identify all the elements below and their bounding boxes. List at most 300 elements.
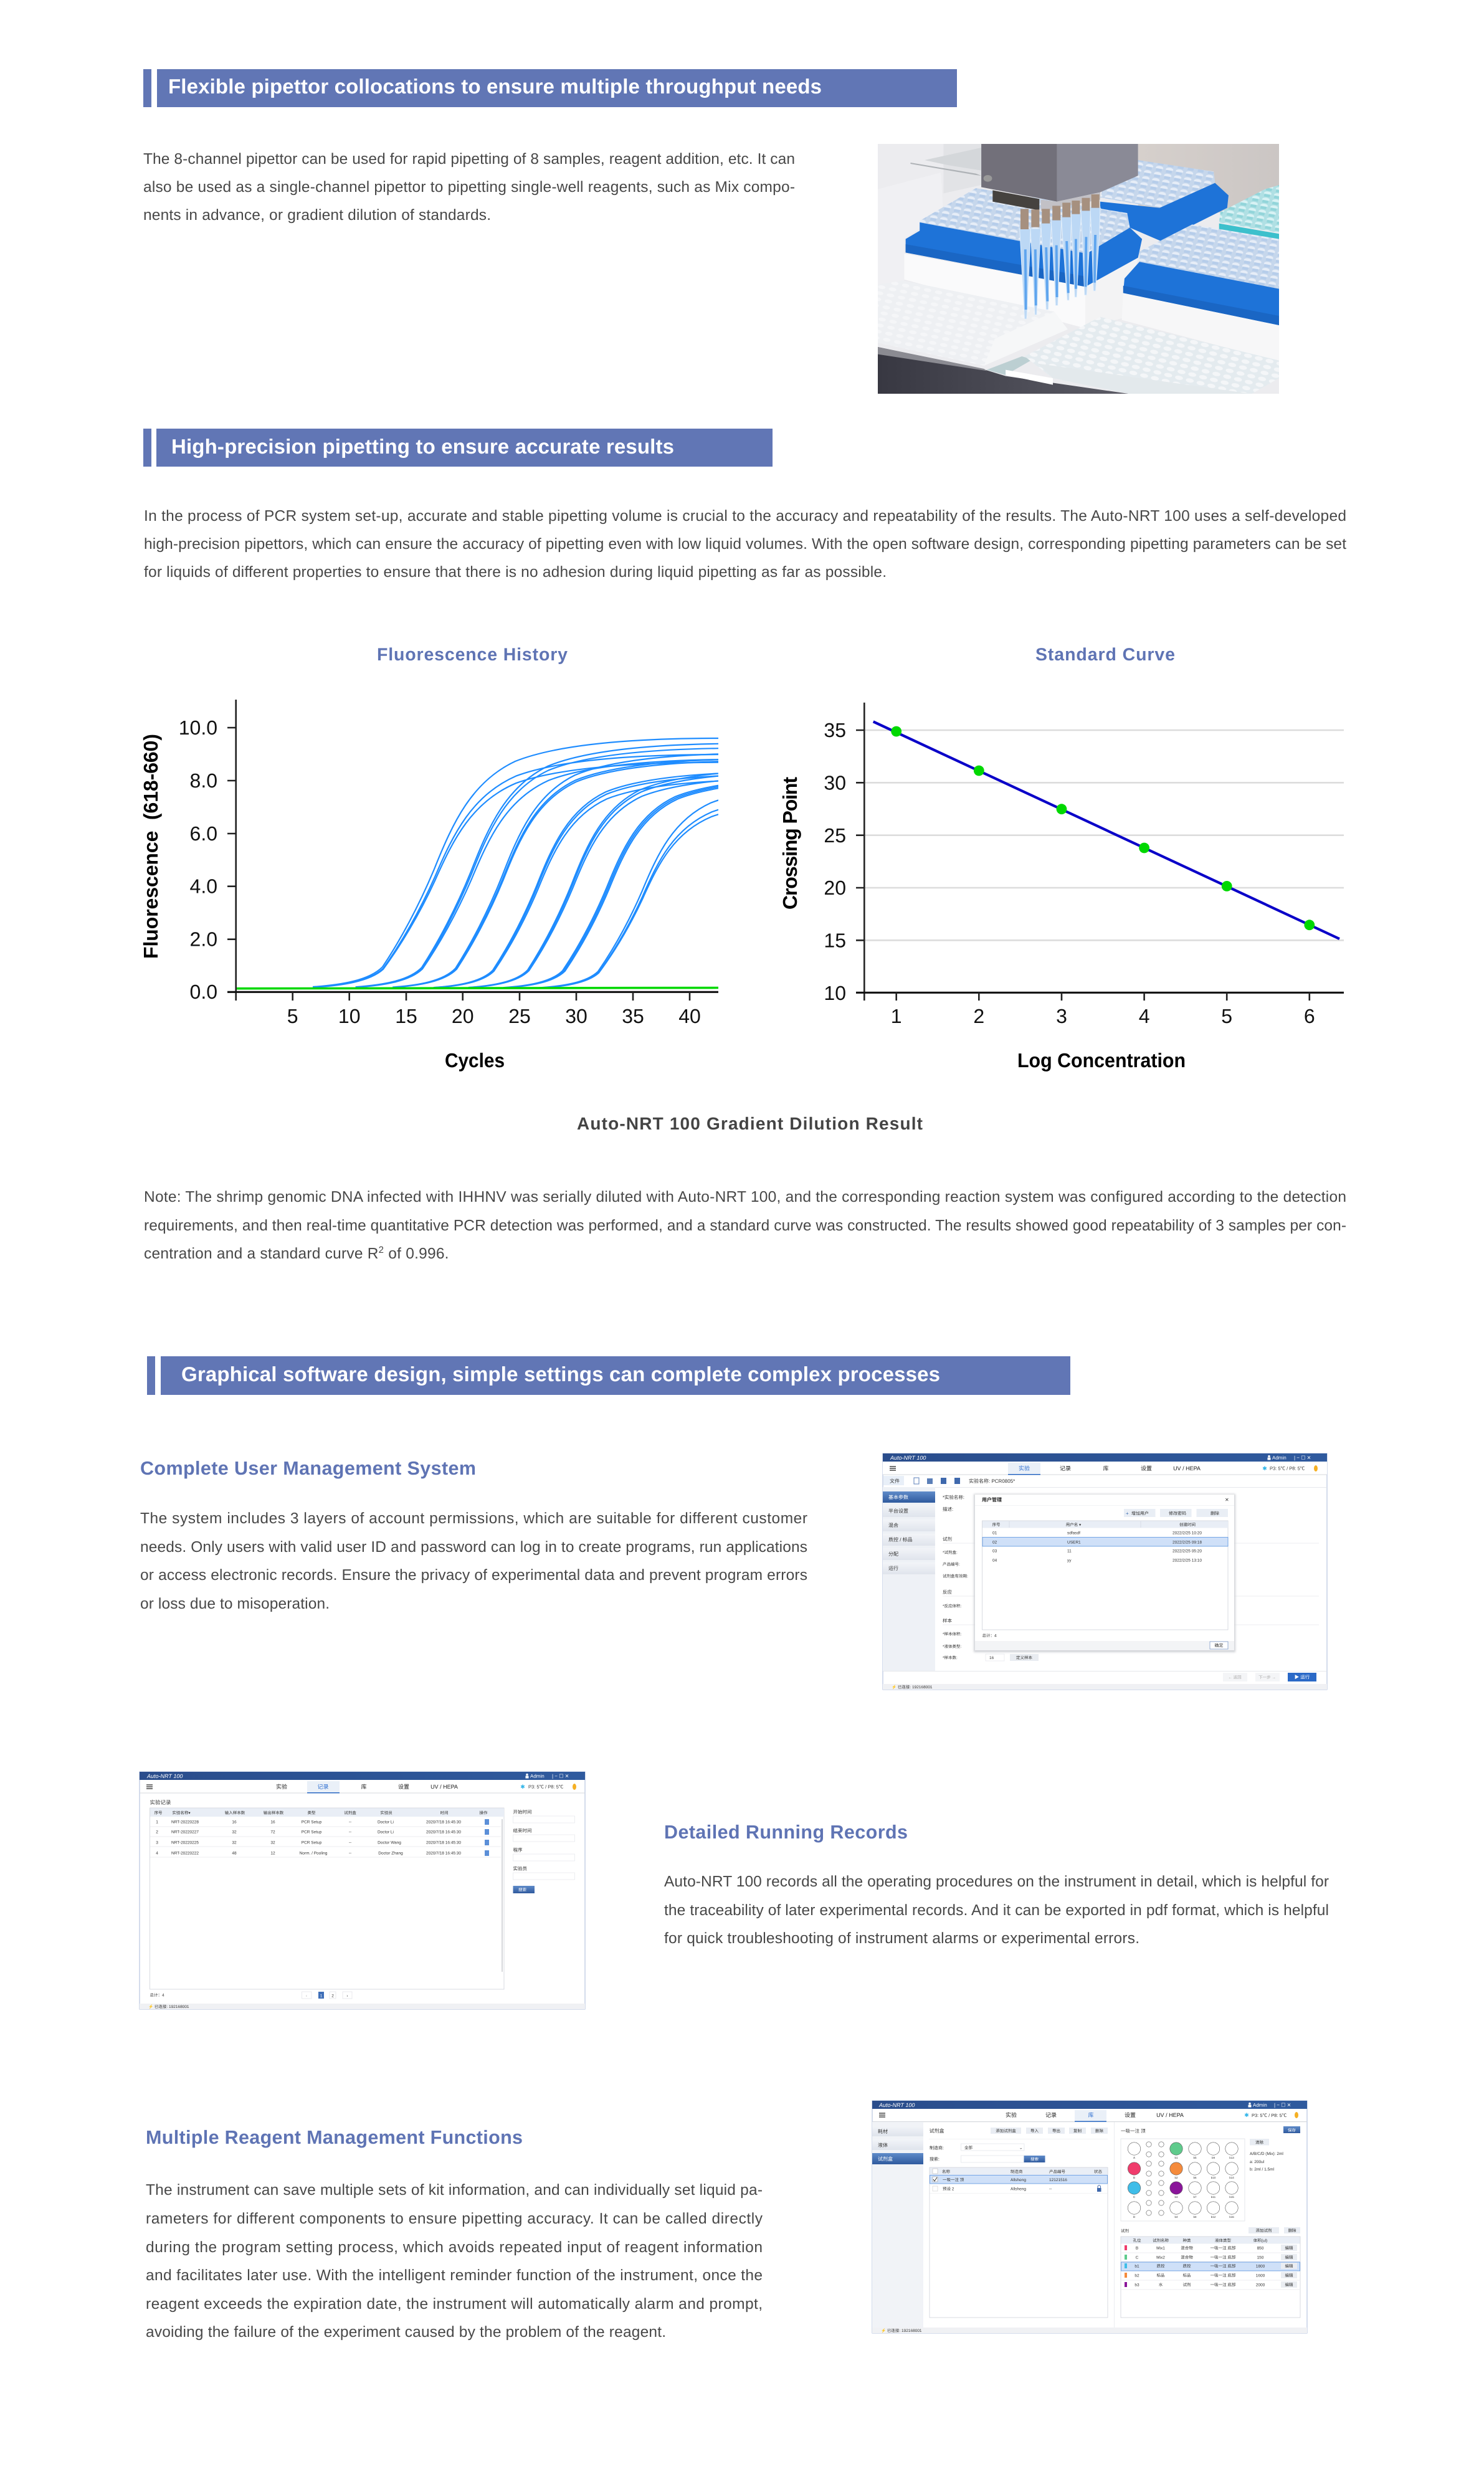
nav tabs: 实验	[1006, 2112, 1017, 2118]
reagent table: 编辑	[1285, 2245, 1293, 2250]
y tick labels: 6.0	[190, 822, 217, 845]
nav tabs: 设置	[398, 1784, 409, 1790]
records table: 2	[156, 1830, 158, 1834]
x tick labels: 35	[622, 1005, 644, 1027]
title bar: Auto-NRT 100	[146, 1773, 183, 1779]
user table: 11	[1067, 1549, 1072, 1554]
reagent table: 编辑	[1285, 2264, 1293, 2269]
nav tabs: ✱	[1262, 1465, 1267, 1472]
x tick labels: 30	[565, 1005, 587, 1027]
y tick labels: 4.0	[190, 875, 217, 897]
kit layout panel: A/B/C/D (Mix): 2ml	[1250, 2152, 1283, 2156]
status bar	[140, 2004, 585, 2009]
records table: 序号	[155, 1810, 163, 1815]
records table: --	[349, 1820, 351, 1824]
records table: Doctor Zhang	[378, 1852, 403, 1855]
records table: 2020/7/18 16:45:30	[426, 1852, 461, 1855]
dialog buttons: 删除	[1211, 1511, 1219, 1516]
kit layout panel: a: 200ul	[1250, 2160, 1265, 2164]
well labels: D	[1133, 2215, 1136, 2219]
search filters: 结束时间	[513, 1828, 532, 1833]
records table: PCR Setup	[302, 1830, 322, 1834]
back rack	[1100, 160, 1215, 208]
x tick labels: 1	[891, 1005, 902, 1027]
caption: gradient dilution result: Auto-NRT 100 Gradient Dilution Result	[577, 1114, 923, 1133]
reagent table: 一吸一注 底部	[1211, 2273, 1236, 2278]
kit table: 制造商	[1011, 2169, 1023, 2174]
section heading: flexible pipettor: Flexible pipettor collocations to ensure multiple throughput needs	[168, 75, 822, 98]
kit table: 状态	[1094, 2169, 1103, 2174]
y tick labels: 25	[824, 824, 846, 847]
user table: sdfasdf	[1067, 1531, 1080, 1535]
title bar: Auto-NRT 100	[890, 1455, 926, 1461]
toolbar	[883, 1476, 1327, 1488]
kit list panel: 试剂盒	[930, 2128, 944, 2134]
sidebar: 分配	[888, 1551, 898, 1557]
nav tabs: P3: 5℃ / P8: 5℃	[1270, 1465, 1305, 1472]
reagent table: 标品	[1156, 2273, 1165, 2278]
text block: note: requirements, and then real-time quantitative PCR detection was performed, and a standard curve was constructed. The results showed good repeatability of 3 samples per con-	[144, 1217, 1346, 1234]
y tick labels: 20	[824, 877, 846, 899]
title bar: Auto-NRT 100	[878, 2102, 915, 2108]
records table	[150, 1808, 504, 1989]
status bar	[872, 2328, 1307, 2333]
text block: reagent management	[146, 2182, 763, 2341]
status bar: ⚡ 已连接: 192168001	[148, 2004, 189, 2009]
text block: user management: or access electronic records. Ensure the privacy of experimental data and prevent program errors	[140, 1567, 807, 1584]
sidebar: 耗材	[878, 2129, 888, 2134]
pagination: 总计：4	[150, 1992, 164, 1997]
records table: 12	[270, 1852, 275, 1855]
form labels: *液体类型:	[943, 1644, 962, 1649]
kit list panel: 全部	[964, 2146, 973, 2151]
right front rack	[1122, 293, 1279, 361]
text block: reagent management: avoiding the failure of the experiment caused by the problem of the reagent.	[146, 2324, 666, 2341]
kit table: Allsheng	[1011, 2187, 1026, 2192]
nav tabs: 库	[361, 1784, 367, 1790]
reagent table: 850	[1257, 2247, 1264, 2250]
reagent table: 体积(ul)	[1253, 2238, 1267, 2243]
section heading: graphical software design: Graphical software design, simple settings can complete complex processes	[181, 1363, 940, 1386]
nav tabs	[872, 2110, 1307, 2122]
x tick labels: 6	[1304, 1005, 1315, 1027]
y tick labels: 0.0	[190, 981, 217, 1003]
kit layout panel: b: 2ml / 1.5ml	[1250, 2167, 1275, 2172]
text block: pipettor description: also be used as a single-channel pipettor to pipetting single-well reagents, such as Mix compo-	[143, 179, 795, 196]
form labels: 试剂	[943, 1536, 952, 1542]
dialog buttons: 增加用户	[1131, 1511, 1149, 1516]
text block: pipetting accuracy: In the process of PCR system set-up, accurate and stable pipetting volume is crucial to the accuracy and repeatability of the results. The Auto-NRT 100 uses a self-developed	[144, 508, 1346, 525]
dark base	[878, 347, 1130, 394]
sidebar: 基本参数	[888, 1495, 908, 1500]
sidebar	[883, 1487, 935, 1671]
kit list panel: 添加试剂盒	[996, 2128, 1016, 2133]
nav tabs: 记录	[1060, 1465, 1071, 1472]
kit list panel: 搜索:	[930, 2157, 939, 2162]
user table: 03	[992, 1549, 997, 1554]
chart title: standard curve: Standard Curve	[1035, 645, 1175, 665]
kit layout panel: 保存	[1288, 2128, 1296, 2133]
nav tabs: 记录	[317, 1784, 329, 1790]
nav tabs: 设置	[1141, 1465, 1152, 1472]
x tick labels: 5	[287, 1005, 298, 1027]
section heading: flexible pipettor	[143, 69, 957, 107]
reagent table: 一吸一注 底部	[1211, 2245, 1236, 2250]
well labels: b14	[1229, 2176, 1234, 2179]
dialog: user management: 确定	[1215, 1643, 1224, 1648]
kit layout panel: 添加试剂	[1256, 2228, 1272, 2233]
records table: 类型	[308, 1810, 316, 1815]
kit table	[930, 2167, 1108, 2318]
y tick labels: 8.0	[190, 769, 217, 792]
nav tabs	[140, 1781, 585, 1793]
user table: 2022/2/25 13:10	[1172, 1559, 1202, 1562]
well labels: b10	[1211, 2176, 1216, 2179]
nav tabs	[883, 1462, 1327, 1475]
reagent table: b1	[1134, 2264, 1139, 2269]
reagent table: 1600	[1256, 2274, 1265, 2278]
text block: reagent management: and facilitates later use. With the intelligent reminder function of the instrument, once the	[146, 2267, 763, 2284]
y tick labels	[179, 716, 217, 1003]
records table: NRT-20220227	[171, 1830, 199, 1834]
text block: user management: or loss due to misoperation.	[140, 1596, 330, 1612]
kit list panel	[929, 2122, 1115, 2333]
y tick labels	[824, 719, 846, 1004]
form labels: 定义样本	[1016, 1655, 1033, 1660]
x tick labels: 2	[973, 1005, 984, 1027]
pipettor head	[981, 144, 1057, 202]
text block: user management: needs. Only users with valid user ID and password can log in to create programs, run applications	[140, 1539, 807, 1556]
text block: note: Note: The shrimp genomic DNA infected with IHHNV was serially diluted with Auto-NRT 100, and the corresponding reaction system was configured according to the detection	[144, 1189, 1346, 1206]
records table: 72	[270, 1830, 275, 1834]
search filters: 开始时间	[513, 1809, 532, 1815]
reagent table: 质控	[1182, 2264, 1191, 2269]
kit table: 产品编号	[1049, 2169, 1065, 2174]
line chart: standard curve	[779, 703, 1344, 1072]
well labels: b13	[1229, 2156, 1234, 2159]
well labels: b3	[1174, 2195, 1178, 2199]
reagent table: 试剂	[1182, 2283, 1191, 2288]
records table: Doctor Wang	[378, 1840, 401, 1845]
y tick labels: 10	[824, 982, 846, 1004]
reagent table: 一吸一注 底部	[1211, 2264, 1236, 2269]
reagent table: 质控	[1156, 2264, 1165, 2269]
reagent table: Mix2	[1156, 2255, 1165, 2260]
y tick labels: 2.0	[190, 928, 217, 951]
dialog buttons: 修改密码	[1169, 1511, 1186, 1516]
nav tabs: UV / HEPA	[430, 1784, 458, 1790]
kit layout panel: 试剂	[1121, 2228, 1129, 2233]
sidebar: 液体	[878, 2142, 888, 2148]
bottom left frosted plate	[878, 280, 1068, 366]
left rack white box	[905, 254, 1085, 328]
reagent table: 混合物	[1181, 2245, 1193, 2250]
records table: 时间	[440, 1810, 449, 1815]
reagent table: 编辑	[1285, 2283, 1293, 2288]
line chart: fluorescence history	[143, 700, 718, 1072]
records table: 实验员	[380, 1810, 392, 1815]
nav tabs: ✱	[1244, 2112, 1249, 2118]
records table: NRT-20220222	[171, 1852, 199, 1855]
records table: 2020/7/18 16:45:30	[426, 1840, 461, 1845]
well labels: B	[1133, 2176, 1135, 2179]
user table: yy	[1067, 1559, 1072, 1562]
text block: reagent management: rameters for different components to ensure pipetting accuracy. It can be called directly	[146, 2210, 763, 2227]
user table: 01	[992, 1531, 997, 1535]
section heading: high-precision pipetting: High-precision pipetting to ensure accurate results	[171, 435, 674, 458]
nav tabs: UV / HEPA	[1173, 1465, 1201, 1472]
records table: PCR Setup	[302, 1840, 322, 1845]
front plate	[1024, 317, 1279, 394]
records table: --	[349, 1840, 351, 1845]
title bar: | − ☐ ✕	[1294, 1455, 1311, 1460]
user table: 2022/2/25 09:18	[1172, 1540, 1202, 1545]
well labels: b9	[1212, 2156, 1215, 2159]
records table: --	[349, 1852, 351, 1855]
screenshot: running records	[140, 1772, 585, 2009]
nav tabs: UV / HEPA	[1156, 2112, 1184, 2118]
heading: reagent management: Multiple Reagent Management Functions	[146, 2127, 523, 2148]
x tick labels	[287, 1005, 701, 1027]
form labels: 试剂盒有效期:	[943, 1574, 968, 1579]
sidebar: 混合	[888, 1523, 898, 1528]
dialog buttons	[1124, 1509, 1228, 1517]
screenshot: reagent library	[872, 2101, 1307, 2333]
chart title: fluorescence history: Fluorescence History	[377, 645, 568, 665]
records table: 操作	[480, 1810, 488, 1815]
heading: running records: Detailed Running Records	[664, 1822, 908, 1843]
x tick labels: 4	[1139, 1005, 1149, 1027]
kit list panel: 制造商:	[930, 2146, 944, 2151]
reagent table: C	[1136, 2255, 1139, 2260]
records table: 32	[232, 1840, 237, 1845]
records table: 16	[232, 1820, 237, 1824]
screenshot: user management dialog	[883, 1453, 1327, 1690]
well labels: b16	[1229, 2215, 1234, 2219]
tips	[1020, 207, 1100, 319]
reagent table: 一吸一注 底部	[1211, 2255, 1236, 2260]
x tick labels: 10	[338, 1005, 360, 1027]
x tick labels	[891, 1005, 1315, 1027]
reagent table: 编辑	[1285, 2255, 1293, 2260]
kit table: --	[1049, 2187, 1052, 2192]
text block: pipetting accuracy	[144, 508, 1346, 581]
nav tabs: ✱	[520, 1784, 525, 1790]
section heading: high-precision pipetting	[143, 429, 773, 467]
form labels: *实验名称:	[943, 1495, 964, 1500]
x tick labels: 3	[1056, 1005, 1067, 1027]
search filters: 程序	[513, 1847, 523, 1853]
reagent table: 2000	[1256, 2283, 1265, 2288]
text block: pipetting accuracy: high-precision pipettors, which can ensure the accuracy of pipetting even with low liquid volumes. With the open software design, corresponding pipetting parameters can be set	[144, 536, 1346, 553]
toolbar: 实验名称: PCR0805*	[969, 1478, 1015, 1484]
records table: NRT-20220228	[171, 1820, 199, 1824]
regression line	[873, 721, 1339, 939]
search filters	[513, 1809, 574, 1893]
records table: 32	[270, 1840, 275, 1845]
y tick labels: 10.0	[179, 716, 217, 739]
records table: 2020/7/18 16:45:30	[426, 1820, 461, 1824]
y axis title: Crossing Point	[779, 777, 801, 910]
kit table: 名称	[942, 2169, 951, 2174]
well labels: C	[1133, 2195, 1136, 2199]
well labels: b2	[1174, 2176, 1178, 2179]
form labels: 样本	[943, 1618, 952, 1624]
reagent table: 液体类型	[1215, 2238, 1231, 2243]
title bar: Admin	[1272, 1455, 1287, 1460]
form labels: *样本体积:	[943, 1632, 962, 1637]
dialog: user management: 用户管理	[982, 1497, 1002, 1503]
text block: pipettor description: The 8-channel pipettor can be used for rapid pipetting of 8 samples, reagent addition, etc. It can	[143, 151, 795, 168]
well labels: b6	[1193, 2176, 1197, 2179]
grid lines	[865, 730, 1344, 940]
reagent table: b3	[1134, 2283, 1139, 2288]
reagent table: 水	[1159, 2283, 1163, 2288]
status bar: ⚡ 已连接: 192168001	[881, 2328, 922, 2333]
amplification curves	[313, 738, 718, 987]
reagent table: 种类	[1182, 2238, 1191, 2243]
text block: reagent management: The instrument can save multiple sets of kit information, and can individually set liquid pa-	[146, 2182, 763, 2199]
records table: 实验名称▾	[172, 1810, 191, 1815]
pagination	[150, 1992, 352, 1999]
form labels: 16	[989, 1656, 994, 1660]
well labels	[1133, 2156, 1234, 2219]
kit table: 一吸一注 顶	[943, 2177, 964, 2182]
text block: note	[144, 1189, 1346, 1262]
records table: PCR Setup	[302, 1820, 322, 1824]
heading: user management: Complete User Management System	[140, 1458, 476, 1479]
text block: pipetting accuracy: for liquids of different properties to ensure that there is no adhesion during liquid pipetting as far as possible.	[144, 564, 887, 581]
records table: 32	[232, 1830, 237, 1834]
well labels: b4	[1174, 2215, 1178, 2219]
x axis title: Log Concentration	[1017, 1049, 1186, 1072]
reagent table: 150	[1257, 2255, 1264, 2260]
well labels: b7	[1193, 2195, 1197, 2199]
x axis title: Cycles	[445, 1049, 505, 1072]
status bar: ⚡ 已连接: 192168001	[892, 1685, 933, 1690]
search filters: 搜索	[518, 1888, 527, 1893]
records table: 48	[232, 1852, 237, 1855]
records table: 1	[156, 1820, 158, 1824]
y tick labels: 15	[824, 930, 846, 952]
text block: user management	[140, 1510, 807, 1612]
kit table: Allsheng	[1011, 2178, 1026, 2182]
text block: running records	[664, 1873, 1329, 1947]
kit table: 预设 2	[943, 2187, 954, 2192]
left rack tips and base	[920, 188, 1130, 255]
sidebar	[872, 2122, 923, 2333]
kit list panel: 搜索	[1030, 2157, 1039, 2162]
pagination: ‹	[306, 1994, 307, 1999]
sidebar: 运行	[888, 1566, 898, 1571]
text block: running records: for quick troubleshooting of instrument alarms or experimental errors.	[664, 1930, 1139, 1947]
reagent table: 混合物	[1181, 2255, 1193, 2260]
records table: 输出样本数	[264, 1810, 284, 1815]
text block: running records: the traceability of later experimental records. And it can be exported in pdf format, which is helpful	[664, 1902, 1329, 1919]
text block: reagent management: reagent exceeds the expiration date, the instrument will automatically alarm and prompt,	[146, 2296, 763, 2313]
title bar	[140, 1772, 585, 1780]
axes	[227, 700, 718, 1001]
footer navigation: ▶ 运行	[1295, 1675, 1310, 1680]
nav tabs: 记录	[1045, 2112, 1057, 2118]
records table: 16	[270, 1820, 275, 1824]
well labels: A	[1133, 2156, 1135, 2159]
screenshot: running records: 实验记录	[150, 1799, 171, 1805]
form labels: *反应体积:	[943, 1604, 962, 1609]
sidebar: 质控 / 标品	[888, 1537, 913, 1543]
data points	[891, 726, 1315, 930]
y tick labels: 30	[824, 771, 846, 794]
form labels: 反应	[943, 1589, 952, 1595]
x tick labels: 25	[508, 1005, 531, 1027]
reagent table: 一吸一注 底部	[1211, 2283, 1236, 2288]
footer navigation: ← 返回	[1228, 1675, 1242, 1680]
kit layout panel	[1121, 2126, 1300, 2318]
y tick labels: 35	[824, 719, 846, 741]
nav tabs: 实验	[1019, 1465, 1030, 1472]
title bar	[872, 2101, 1307, 2109]
title bar: Admin	[530, 1773, 545, 1779]
status bar	[883, 1684, 1327, 1690]
footer navigation: 下一步 →	[1258, 1675, 1276, 1680]
records table: Norm. / Pooling	[300, 1852, 328, 1855]
dialog: user management: ✕	[1225, 1497, 1229, 1503]
teal rack	[1219, 185, 1279, 233]
text block: pipettor description: nents in advance, or gradient dilution of standards.	[143, 207, 491, 224]
toolbar: 文件	[890, 1478, 900, 1484]
user table: 2022/2/25 10:20	[1172, 1531, 1202, 1535]
user table: 02	[992, 1540, 997, 1545]
reagent table: 试剂名称	[1153, 2238, 1169, 2243]
records table: 试剂盒	[344, 1810, 356, 1815]
records table: 3	[156, 1840, 158, 1845]
well labels: b12	[1211, 2215, 1216, 2219]
nav tabs: P3: 5℃ / P8: 5℃	[528, 1784, 564, 1789]
kit list panel: 复制	[1073, 2128, 1082, 2133]
records table: NRT-20220225	[171, 1840, 199, 1845]
x tick labels: 5	[1221, 1005, 1232, 1027]
section heading: graphical software design	[147, 1356, 1070, 1395]
reagent table	[1121, 2237, 1300, 2318]
reagent table: b2	[1134, 2274, 1139, 2278]
y axis title: Fluorescence (618-660)	[140, 734, 162, 959]
reagent table: 孔位	[1133, 2238, 1141, 2243]
well labels: b5	[1193, 2156, 1197, 2159]
kit list panel: 导出	[1052, 2128, 1060, 2133]
user table: 04	[992, 1559, 997, 1562]
kit layout panel: 清除	[1255, 2140, 1263, 2145]
user table	[982, 1521, 1228, 1630]
user table: 创建时间	[1179, 1523, 1196, 1528]
text block: note: centration and a standard curve R	[144, 1245, 379, 1262]
text block: user management: The system includes 3 layers of account permissions, which are suitable for different customer	[140, 1510, 807, 1527]
user table: 序号	[992, 1523, 1001, 1528]
kit table: 12121516	[1049, 2178, 1067, 2182]
pagination: 2	[331, 1994, 334, 1999]
dialog: user management	[974, 1494, 1235, 1652]
reagent table: B	[1136, 2247, 1138, 2250]
user table: 用户名 ▾	[1066, 1523, 1082, 1528]
records table: 2020/7/18 16:45:30	[426, 1830, 461, 1834]
sidebar: 平台设置	[888, 1508, 908, 1514]
reagent table: 标品	[1182, 2273, 1191, 2278]
records table: --	[349, 1830, 351, 1834]
dialog: user management: 总计：4	[982, 1634, 997, 1638]
title bar	[883, 1453, 1327, 1462]
x tick labels: 20	[452, 1005, 473, 1027]
text block: pipettor description	[143, 151, 795, 224]
reagent table: 1800	[1256, 2264, 1265, 2269]
